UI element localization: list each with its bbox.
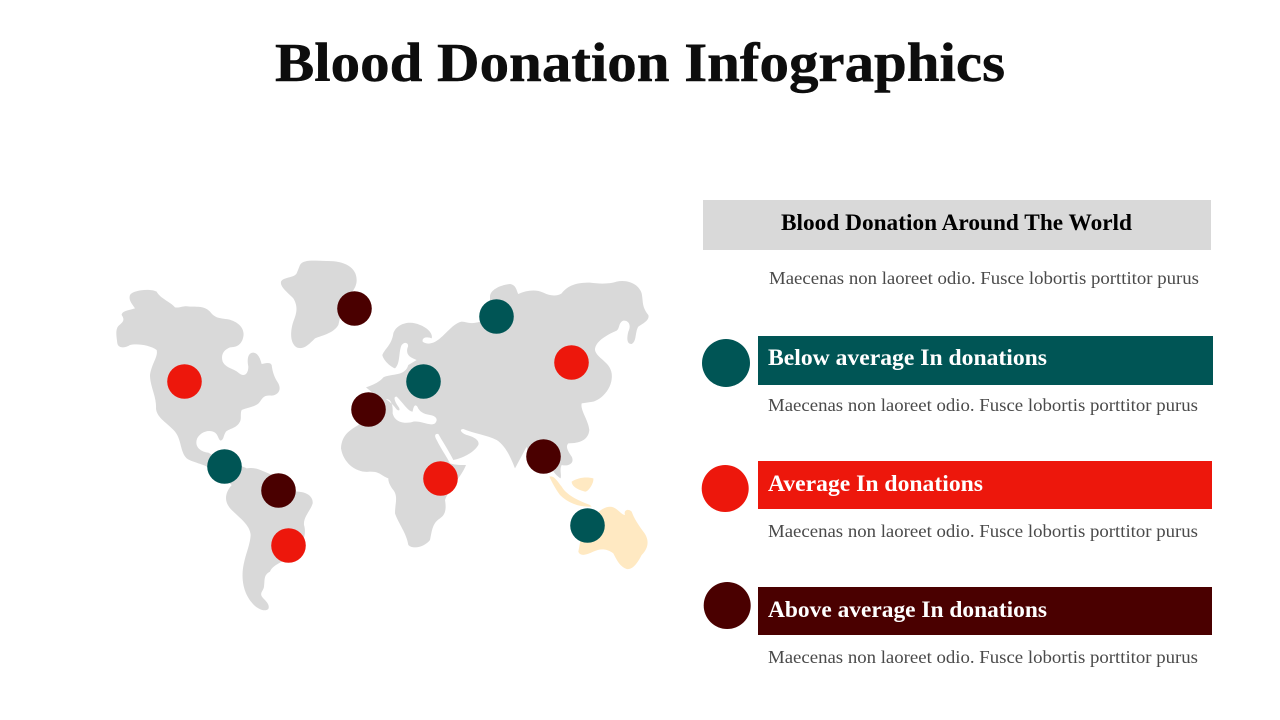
- legend: above average: [704, 582, 1212, 667]
- map marker: southern South America: [271, 528, 306, 563]
- map marker: Greenland: [337, 291, 372, 326]
- map: Australia and Oceania (highlighted): [549, 476, 648, 569]
- description: Maecenas non laoreet odio. Fusce lobortis porttitor purus: [768, 521, 1198, 541]
- map marker: North America: [167, 364, 202, 399]
- map marker: Russia: [479, 299, 514, 334]
- map marker: Europe: [406, 364, 441, 399]
- panel heading: Blood Donation Around The World: [781, 210, 1132, 235]
- dark red label bar: [758, 587, 1212, 635]
- map marker: China: [554, 345, 589, 380]
- red label bar: [758, 461, 1212, 509]
- map: Eurasia and Africa: [341, 281, 649, 547]
- title: Blood Donation Infographics: [275, 32, 1005, 93]
- map marker: Australia: [570, 508, 605, 543]
- map marker: East Africa: [423, 461, 458, 496]
- icon: dark red dot: [704, 582, 751, 629]
- map marker: northern South America: [261, 473, 296, 508]
- dark red label bar: Above average In donations: [768, 597, 1047, 622]
- map: the Americas: [116, 290, 313, 610]
- legend: average: [702, 461, 1212, 541]
- icon: teal dot: [702, 339, 750, 387]
- panel intro text: Maecenas non laoreet odio. Fusce lobortis porttitor purus: [769, 268, 1199, 288]
- world map: [116, 261, 649, 610]
- map marker: Central America: [207, 449, 242, 484]
- red label bar: Average In donations: [768, 471, 983, 496]
- map marker: Southeast Asia: [526, 439, 561, 474]
- panel heading: [703, 200, 1211, 250]
- legend: below average: [702, 336, 1213, 415]
- map: Mediterranean Sea: [386, 397, 437, 424]
- icon: red dot: [702, 465, 749, 512]
- map marker: West Africa: [351, 392, 386, 427]
- description: Maecenas non laoreet odio. Fusce lobortis porttitor purus: [768, 647, 1198, 667]
- teal label bar: [758, 336, 1213, 385]
- description: Maecenas non laoreet odio. Fusce lobortis porttitor purus: [768, 395, 1198, 415]
- map: Greenland: [281, 261, 357, 348]
- teal label bar: Below average In donations: [768, 345, 1047, 370]
